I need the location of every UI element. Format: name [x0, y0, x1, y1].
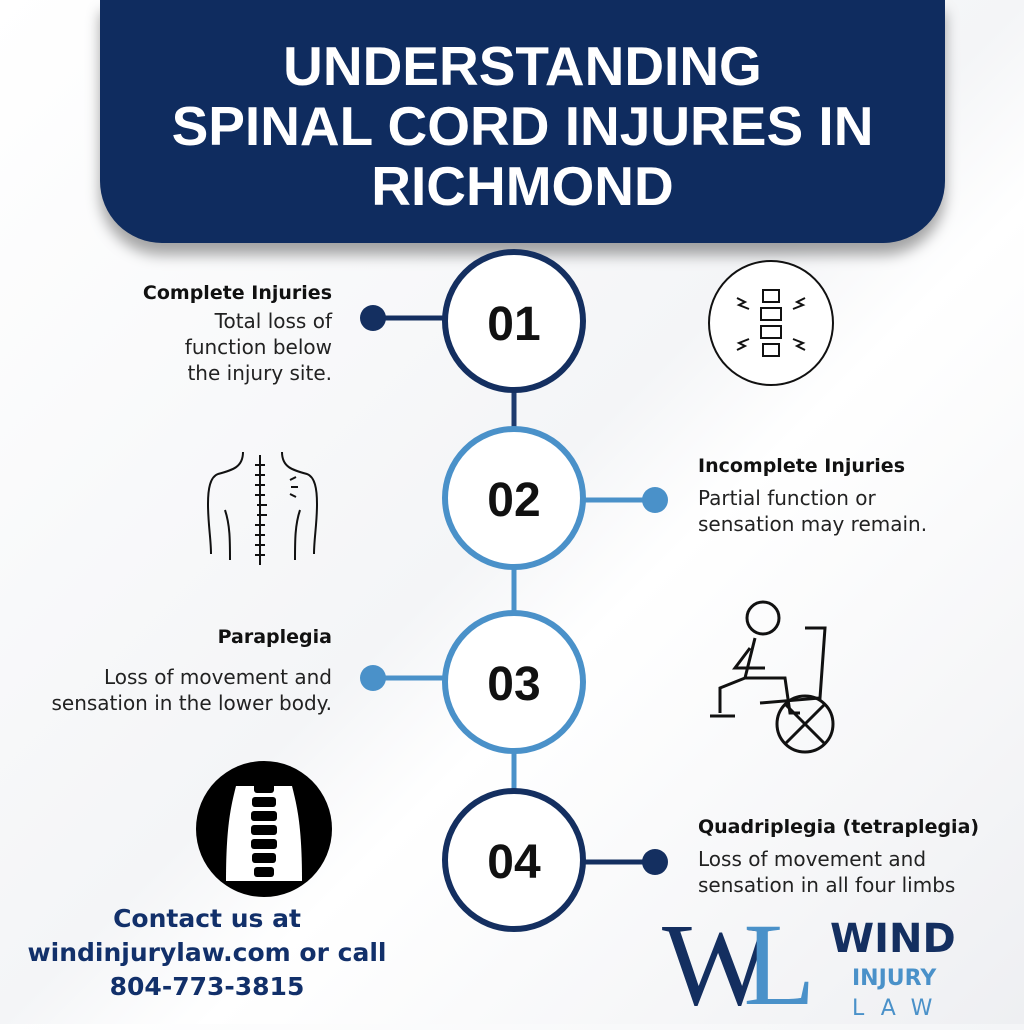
item 1 text: function below	[185, 335, 332, 359]
item 3 text: Loss of movement and	[104, 665, 332, 689]
timeline graphic: 04	[487, 836, 541, 889]
contact text: Contact us at	[113, 904, 301, 933]
title banner: UNDERSTANDING	[283, 35, 762, 97]
item 3 text: Paraplegia	[218, 626, 332, 648]
logo: LAW	[852, 996, 948, 1021]
icon: black circle spine	[196, 761, 332, 897]
title banner: RICHMOND	[371, 155, 674, 217]
logo: WL	[662, 899, 785, 1030]
item 4 text: Loss of movement and	[698, 847, 926, 871]
logo: WIND	[830, 916, 956, 962]
contact text	[28, 904, 386, 1001]
item 1 text	[143, 282, 332, 385]
item 4 text: Quadriplegia (tetraplegia)	[698, 816, 979, 838]
contact text: windinjurylaw.com or call	[28, 938, 386, 967]
item 2 text: Partial function or	[698, 486, 876, 510]
item 2 text: sensation may remain.	[698, 512, 927, 536]
item 4 text	[698, 816, 979, 897]
timeline graphic: 03	[487, 658, 541, 711]
item 1 text: the injury site.	[187, 361, 332, 385]
icon: spine with pain	[708, 260, 834, 386]
title banner	[100, 0, 945, 243]
item 3 text	[51, 626, 332, 715]
item 1 text: Total loss of	[215, 309, 332, 333]
item 4 text: sensation in all four limbs	[698, 873, 955, 897]
item 3 text: sensation in the lower body.	[51, 691, 332, 715]
logo	[662, 899, 956, 1030]
logo: INJURY	[852, 966, 936, 991]
timeline graphic: 02	[487, 474, 541, 527]
timeline graphic: 01	[487, 298, 541, 351]
icon: wheelchair	[710, 600, 834, 754]
item 1 text: Complete Injuries	[143, 282, 332, 304]
contact text: 804-773-3815	[110, 972, 304, 1001]
icon: back with spine	[207, 452, 318, 565]
item 2 text	[698, 455, 927, 536]
item 2 text: Incomplete Injuries	[698, 455, 905, 477]
title banner: SPINAL CORD INJURES IN	[172, 95, 873, 157]
